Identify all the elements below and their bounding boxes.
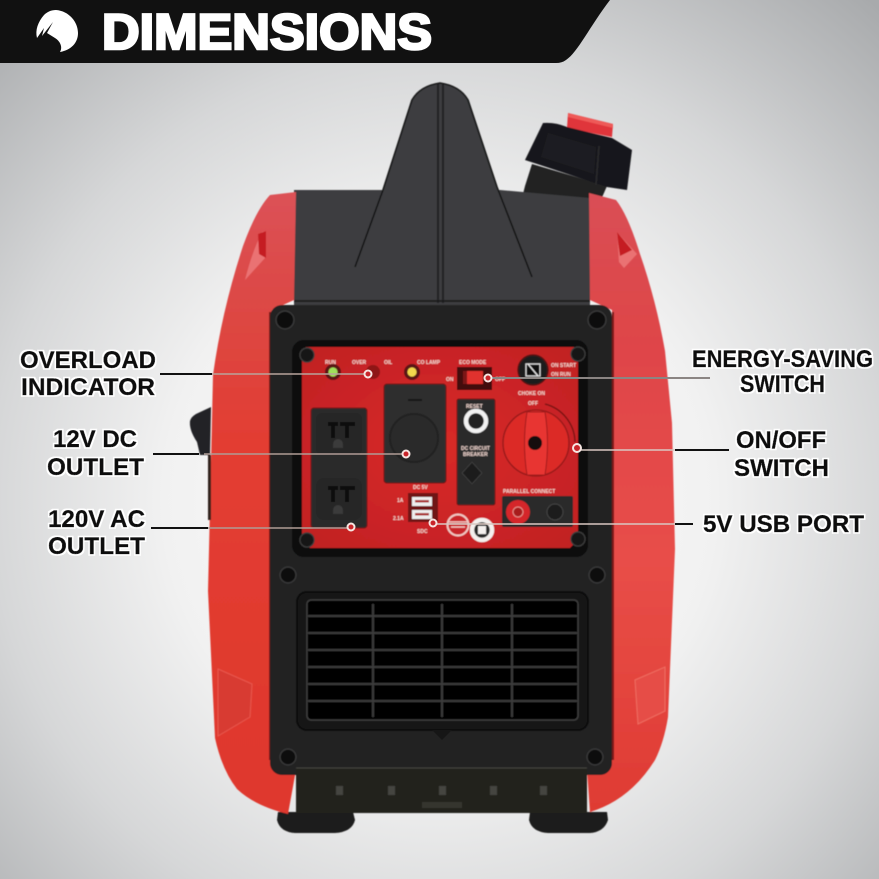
- on/off knob: [503, 401, 575, 476]
- engine switch icon: ON START: [551, 363, 576, 369]
- feet: [277, 812, 608, 833]
- USB port: SDC: [417, 529, 428, 535]
- callout: 5V USB port: 5V USB PORT: [703, 511, 864, 538]
- callout: on/off switch: SWITCH: [734, 455, 829, 482]
- callout: overload indicator: [20, 347, 372, 401]
- indicator lights: [325, 360, 441, 380]
- indicator lights: CO LAMP: [417, 360, 441, 366]
- callout: 12V DC outlet: OUTLET: [47, 454, 144, 481]
- generator: [190, 83, 675, 833]
- control panel: [292, 340, 588, 557]
- black front frame: [270, 305, 612, 775]
- callout: energy-saving switch: SWITCH: [740, 371, 825, 398]
- callout: on/off switch: [573, 427, 829, 482]
- indicator lights: RUN: [325, 360, 336, 366]
- engine switch icon: ON RUN: [551, 372, 571, 378]
- parallel connect: PARALLEL CONNECT: [503, 489, 555, 495]
- indicator lights: OIL: [384, 360, 392, 366]
- engine switch icon: [518, 355, 576, 397]
- air vent: [297, 592, 588, 740]
- right red shell: [587, 193, 675, 812]
- reset and breaker plate: RESET: [466, 404, 483, 410]
- top housing: [294, 190, 590, 310]
- callout: 120V AC outlet: OUTLET: [48, 533, 145, 560]
- USB port: 1A: [397, 498, 404, 504]
- energy-saving switch: ECO MODE: [459, 360, 487, 366]
- callout: overload indicator: INDICATOR: [21, 374, 155, 401]
- USB port: DC 5V: [413, 485, 428, 491]
- left red shell: [208, 192, 296, 814]
- gas cap: [522, 113, 632, 202]
- engine switch icon: CHOKE ON: [518, 391, 545, 397]
- parallel connect: [502, 489, 573, 527]
- ground and warning symbols: [448, 514, 492, 540]
- callout: 120V AC outlet: [48, 506, 354, 560]
- handle: [294, 83, 590, 303]
- bottom strip: [296, 768, 587, 813]
- callout: 5V USB port: [430, 511, 864, 538]
- indicator lights: OVER: [352, 360, 367, 366]
- panel screws: [300, 347, 585, 547]
- reset and breaker plate: [457, 399, 495, 505]
- title: DIMENSIONS: [102, 4, 432, 60]
- frame screws: [276, 311, 606, 765]
- callout: energy-saving switch: [484, 346, 873, 398]
- callout: on/off switch: ON/OFF: [736, 427, 826, 454]
- USB port: [393, 485, 438, 535]
- on/off knob: OFF: [528, 401, 538, 407]
- callout: 120V AC outlet: 120V AC: [48, 506, 145, 533]
- header banner: [0, 0, 610, 63]
- callout: 12V DC outlet: 12V DC: [53, 426, 137, 453]
- 12V DC outlet cover: [384, 384, 446, 483]
- side handle: [190, 407, 211, 455]
- reset and breaker plate: DC CIRCUIT: [461, 446, 490, 452]
- reset and breaker plate: BREAKER: [463, 452, 488, 458]
- callout: overload indicator: OVERLOAD: [20, 347, 156, 374]
- energy-saving switch: OFF: [495, 377, 505, 383]
- USB port: 2.1A: [393, 516, 404, 522]
- energy-saving switch: ON: [446, 377, 454, 383]
- AC outlets: [311, 408, 367, 528]
- icon: brand logo: [36, 10, 78, 52]
- callout: 12V DC outlet: [47, 426, 410, 481]
- energy-saving switch: [446, 360, 505, 390]
